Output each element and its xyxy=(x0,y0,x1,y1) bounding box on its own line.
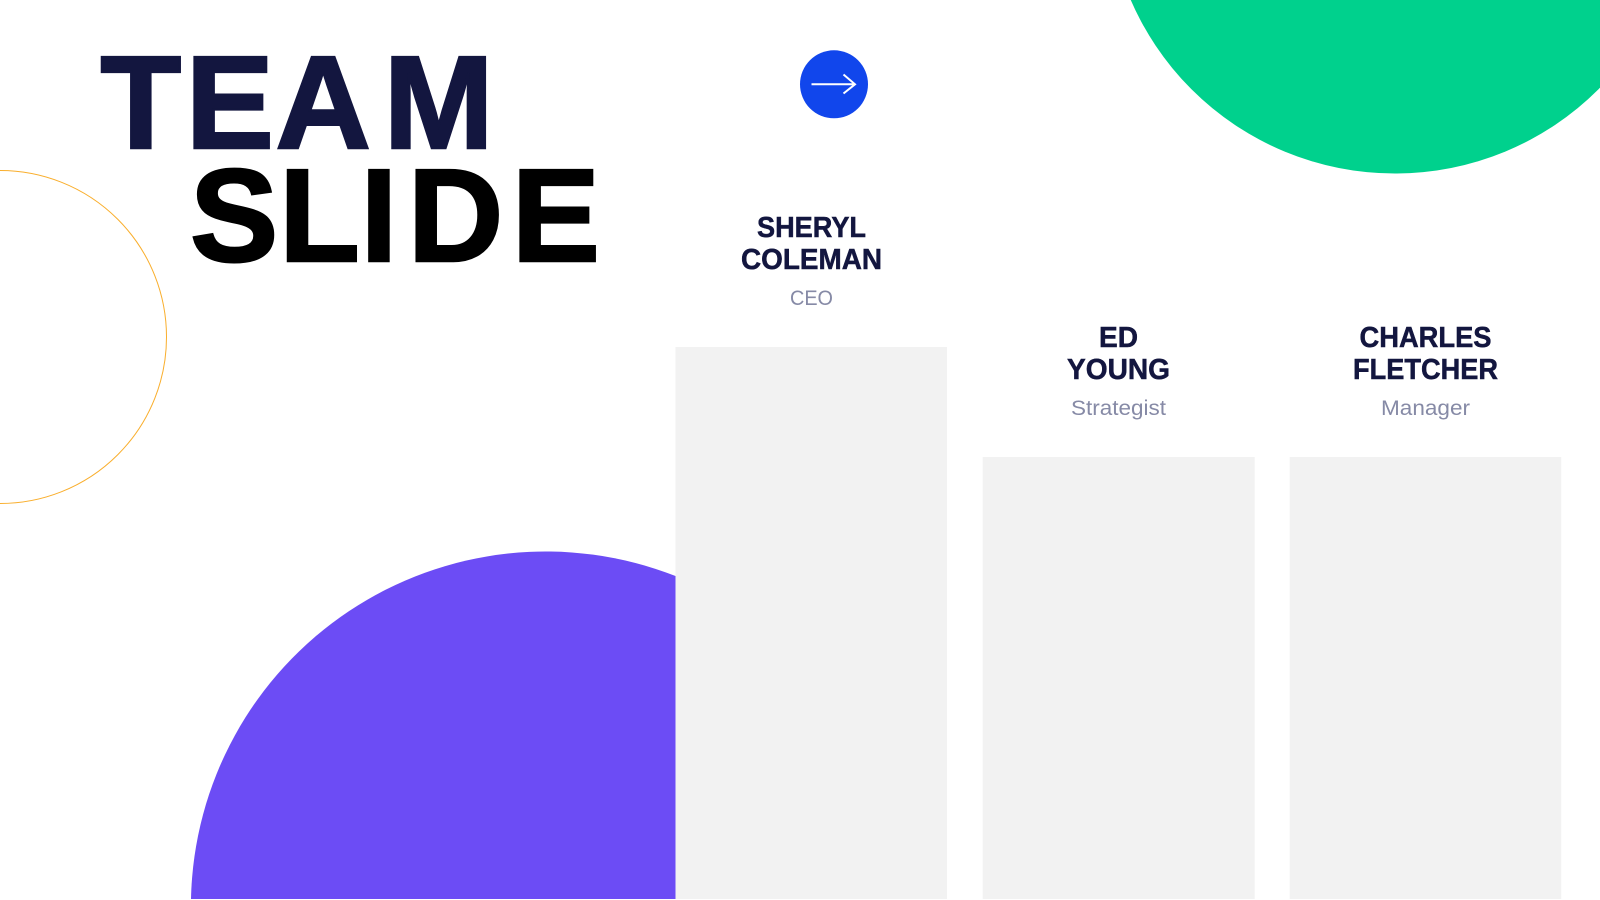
photo placeholder xyxy=(1290,457,1561,899)
orange outline circle decoration xyxy=(0,170,166,504)
team member: Charles Fletcher xyxy=(1290,322,1561,899)
title: SLIDE xyxy=(190,142,600,289)
purple semicircle decoration xyxy=(191,552,676,899)
green circle decoration xyxy=(1107,0,1600,174)
role: Manager xyxy=(1381,397,1470,420)
team member: Ed Young xyxy=(983,322,1255,899)
icon: arrow in blue circle xyxy=(800,50,868,118)
name: SHERYL xyxy=(757,212,866,244)
title xyxy=(100,29,600,289)
second name line: COLEMAN xyxy=(741,244,882,276)
second name line: FLETCHER xyxy=(1353,354,1498,386)
photo placeholder xyxy=(676,347,947,899)
title: TEAM xyxy=(100,29,494,176)
role: CEO xyxy=(790,287,833,310)
name: ED xyxy=(1099,322,1138,354)
name: CHARLES xyxy=(1360,322,1492,354)
role: Strategist xyxy=(1071,397,1166,420)
photo placeholder xyxy=(983,457,1255,899)
team member: Sheryl Coleman xyxy=(676,212,947,899)
second name line: YOUNG xyxy=(1067,354,1170,386)
